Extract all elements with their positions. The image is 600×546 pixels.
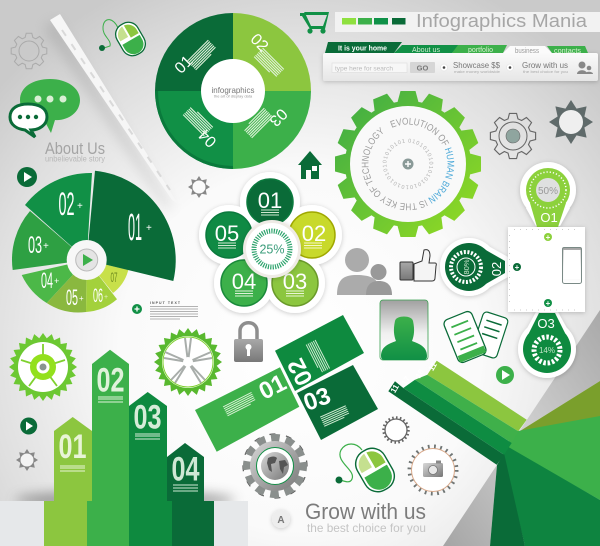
segment labels: 05 <box>66 285 78 310</box>
arrow 02: 02 <box>96 362 124 400</box>
icon: globe gear <box>238 429 312 503</box>
button: letter A <box>272 510 290 528</box>
center percent: 25% <box>259 242 285 256</box>
card 02: 02 <box>282 354 319 390</box>
petal 05 <box>206 212 252 258</box>
petal 03: 03 <box>283 269 307 294</box>
icon: thumbs up <box>400 250 436 281</box>
navigation bar: the best choice for you <box>523 69 568 74</box>
plus marker and note <box>132 301 198 319</box>
petal 02: 02 <box>302 221 326 246</box>
pin 01: 50% <box>538 186 558 197</box>
icon: dark sun gear <box>549 100 593 144</box>
icon: phone <box>562 247 582 284</box>
plus icon <box>402 158 414 170</box>
navigation bar: business <box>515 48 539 55</box>
center percent <box>243 220 301 278</box>
heading: grow with us: the best choice for you <box>307 521 426 535</box>
icon: small sun gear lower <box>16 449 38 471</box>
segment 02: 02 <box>247 31 271 55</box>
circular slogan: EVOLUTION OF HUMAN BRAIN IS THE KEY OF TECHNOLOGY <box>362 118 454 210</box>
plus markers <box>513 233 552 308</box>
arrow 01: 01 <box>58 428 86 466</box>
card 02 <box>275 315 364 391</box>
big gear badge <box>335 91 481 237</box>
card 03 <box>297 365 378 440</box>
plus markers: + <box>515 263 520 272</box>
segment 03: 03 <box>266 105 290 129</box>
navigation bar: GO <box>417 64 428 72</box>
center title: infographics <box>212 85 254 95</box>
segment labels: 01 <box>128 207 142 249</box>
icon: notes <box>442 310 509 364</box>
icon: padlock <box>234 323 263 362</box>
folded paper corner <box>443 310 600 546</box>
icon: top mouse <box>99 18 149 60</box>
portrait card <box>380 300 428 360</box>
navigation bar: type here for search <box>335 66 393 72</box>
pin 01: O1 <box>540 210 558 225</box>
plus markers: + <box>546 233 551 242</box>
segment labels: 06 <box>93 286 103 307</box>
petal 04: 04 <box>232 269 256 294</box>
icon: house <box>298 151 322 179</box>
plus markers: + <box>546 299 551 308</box>
segment 04: 04 <box>196 126 220 150</box>
segment text lines <box>183 40 284 138</box>
petal 05: 05 <box>215 221 239 246</box>
icon: people <box>337 248 392 295</box>
icon: play green <box>496 366 514 384</box>
ribbon stripes <box>388 360 527 465</box>
arrow 04: 04 <box>172 450 200 488</box>
petal 01 <box>247 179 293 225</box>
icon: play dark <box>17 167 37 187</box>
petal 04 <box>221 260 267 306</box>
segment labels: + <box>79 294 84 303</box>
segment 01: 01 <box>172 53 196 77</box>
navigation bar <box>323 42 598 81</box>
icon: shopping cart <box>300 12 329 34</box>
icon: lime gear <box>9 333 77 401</box>
navigation bar: Grow with us <box>522 60 568 70</box>
card 01: 01 <box>255 369 291 405</box>
icon: speech bubbles <box>10 79 80 137</box>
petal 01: 01 <box>258 188 282 213</box>
heading: about us: unbelievable story <box>45 154 105 164</box>
arrow 02 <box>92 350 129 501</box>
card 01 <box>195 367 299 452</box>
pin 03: 14% <box>539 346 555 355</box>
ribbon stripes: 18 <box>414 367 426 380</box>
navigation bar: portfolio <box>468 47 493 54</box>
plus marker and note: INPUT TEXT <box>150 301 181 305</box>
chart: top donut <box>155 13 311 169</box>
shadow under arrows <box>15 491 235 509</box>
icon: dark outline gear <box>490 113 536 159</box>
navigation bar: About us <box>412 47 440 54</box>
segment labels: + <box>54 276 59 286</box>
icon: small sun gear <box>188 176 210 198</box>
segment labels: + <box>77 201 83 212</box>
chart: flower <box>199 172 342 313</box>
pin 02 <box>440 238 508 296</box>
pin 02: 80% <box>462 259 471 275</box>
icon: lower mouse <box>336 443 400 497</box>
heading: grow with us: Grow with us <box>305 499 426 524</box>
segment labels: 03 <box>28 232 42 259</box>
ribbon stripes: 17 <box>400 374 412 387</box>
segment labels: 04 <box>41 268 53 293</box>
ribbon stripes: 11 <box>427 360 439 373</box>
petal 03 <box>272 260 318 306</box>
icon: ring inside outline gear <box>19 41 39 61</box>
segment labels: 02 <box>58 186 74 222</box>
icon: outline gear top left <box>11 33 47 69</box>
navigation bar: contacts <box>554 48 582 55</box>
segment labels: + <box>43 241 49 252</box>
green polygon burst <box>490 381 600 546</box>
arrow 04 <box>167 443 204 501</box>
segment labels <box>28 186 152 310</box>
icon: camera gear <box>410 446 456 494</box>
chart: left fan wheel <box>12 171 176 312</box>
pin 02: 02 <box>489 262 504 276</box>
arrow 03: 03 <box>134 398 162 436</box>
navigation bar: Showcase $$ <box>453 60 500 70</box>
binder strip <box>44 14 178 208</box>
heading: about us <box>45 140 105 164</box>
pin 03 <box>518 312 576 378</box>
icon: play lower left <box>20 418 37 434</box>
icon: small dark gear ring <box>384 418 408 442</box>
heading: about us: About Us <box>45 140 105 158</box>
arrow 01 <box>54 417 92 501</box>
panel: white card with phone <box>508 227 585 312</box>
petal 02 <box>289 212 335 258</box>
navigation bar: It is your home <box>338 46 387 52</box>
icon: wheel gear <box>154 328 222 396</box>
header band <box>335 11 600 32</box>
chart: top donut: the art of display data <box>214 94 253 98</box>
segment labels: + <box>104 294 108 301</box>
segment labels: 07 <box>110 269 118 285</box>
bottom colour band <box>0 501 248 546</box>
pin 01 <box>520 162 576 227</box>
chart: arrows <box>54 350 204 501</box>
button: letter A: A <box>277 515 285 526</box>
binary ring: 0101010101010101010101010101010101 <box>382 138 434 190</box>
heading: grow with us <box>305 499 426 535</box>
ribbon stripes: 11 <box>389 382 401 395</box>
pin 03: O3 <box>537 316 555 331</box>
header band: Infographics Mania <box>416 11 588 31</box>
segment labels: + <box>146 223 152 234</box>
card 03: 03 <box>300 382 334 417</box>
arrow 03 <box>129 392 167 501</box>
navigation bar: make money worldwide <box>454 69 501 74</box>
